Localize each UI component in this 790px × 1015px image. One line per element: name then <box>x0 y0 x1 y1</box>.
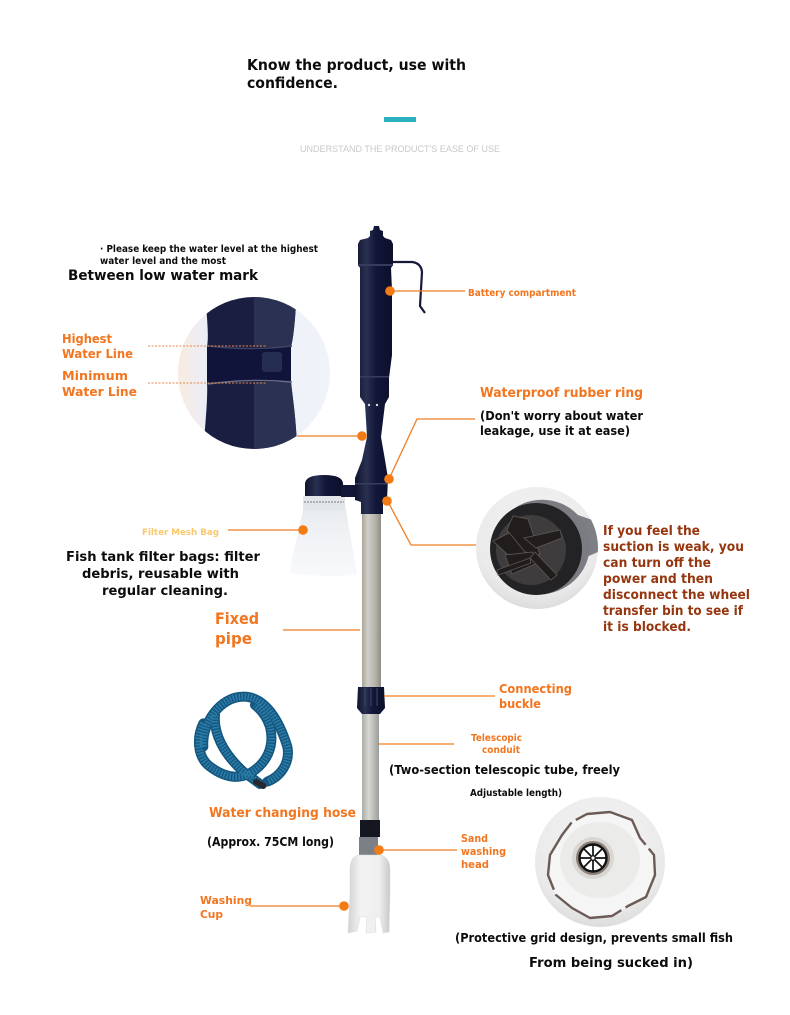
water line labels: Highest <box>62 331 112 346</box>
connecting buckle <box>357 687 385 714</box>
note: rubber ring: leakage, use it at ease) <box>480 424 630 438</box>
note: rubber ring: (Don't worry about water <box>480 409 643 423</box>
title: Know the product, use with <box>247 56 466 74</box>
label: sand washing head: head <box>461 859 489 871</box>
label: fixed pipe: pipe <box>215 629 252 648</box>
water changing hose <box>199 697 288 786</box>
pump body <box>355 226 393 514</box>
water level note <box>68 244 318 284</box>
detail circle: water lines <box>178 290 330 455</box>
note: suction: power and then <box>603 572 713 587</box>
water level note: water level and the most <box>100 256 226 267</box>
label: telescopic conduit: conduit <box>482 745 520 756</box>
water level note: Between low water mark <box>68 268 259 284</box>
filter bag <box>289 505 357 576</box>
label: washing cup <box>200 894 252 921</box>
note: suction: If you feel the <box>603 524 700 539</box>
label: battery compartment: Battery compartment <box>468 288 576 299</box>
hook <box>392 262 425 313</box>
sand head neck <box>359 837 378 855</box>
label: sand washing head <box>461 833 506 871</box>
product: pump <box>289 226 425 933</box>
note: protective grid: (Protective grid design, prevents small fish <box>455 931 733 945</box>
note: filter bags: debris, reusable with <box>82 566 239 582</box>
note: telescopic tube <box>389 763 620 799</box>
note: telescopic tube: (Two-section telescopic tube, freely <box>389 763 620 777</box>
label: telescopic conduit <box>471 733 522 756</box>
filter cap <box>305 475 343 496</box>
upper tube <box>362 510 381 688</box>
label: sand washing head: Sand <box>461 833 488 845</box>
note: protective grid <box>455 931 733 971</box>
label: sand washing head: washing <box>461 846 506 858</box>
title accent bar <box>384 117 416 122</box>
water level note: · Please keep the water level at the highest <box>100 244 318 255</box>
label: telescopic conduit: Telescopic <box>471 733 522 744</box>
label: washing cup: Cup <box>200 908 223 921</box>
title <box>247 56 466 92</box>
note: rubber ring <box>480 409 643 438</box>
title: confidence. <box>247 74 338 92</box>
label: fixed pipe: Fixed <box>215 609 259 628</box>
water line labels: Water Line <box>62 346 133 361</box>
dashed water level lines <box>148 346 266 383</box>
note: suction: suction is weak, you <box>603 540 744 555</box>
note: filter bags: regular cleaning. <box>102 583 228 599</box>
label: water changing hose: Water changing hose <box>209 806 356 821</box>
label: connecting buckle <box>499 681 572 711</box>
note: telescopic tube: Adjustable length) <box>470 788 562 799</box>
callout dots <box>298 286 395 911</box>
note: filter bags: Fish tank filter bags: filter <box>66 549 260 565</box>
water line labels: Minimum <box>62 368 128 383</box>
note: suction <box>603 524 750 635</box>
note: hose length: (Approx. 75CM long) <box>207 835 334 849</box>
label: connecting buckle: buckle <box>499 696 541 711</box>
note: suction: it is blocked. <box>603 620 691 635</box>
lower tube <box>362 712 379 822</box>
detail circle: impeller <box>476 485 604 609</box>
note: filter bags <box>66 549 260 599</box>
note: suction: transfer bin to see if <box>603 604 743 619</box>
detail circle: protective grid <box>535 797 665 927</box>
washing cup <box>348 855 390 933</box>
note: suction: can turn off the <box>603 556 711 571</box>
subtitle: UNDERSTAND THE PRODUCT'S EASE OF USE <box>300 144 500 155</box>
label: waterproof rubber ring: Waterproof rubber ring <box>480 386 643 401</box>
note: protective grid: From being sucked in) <box>529 955 693 971</box>
label: connecting buckle: Connecting <box>499 681 572 696</box>
label: filter mesh bag: Filter Mesh Bag <box>142 528 219 538</box>
dark band <box>360 820 380 837</box>
water line labels: Water Line <box>62 384 137 399</box>
water line labels <box>62 331 137 399</box>
label: fixed pipe <box>215 609 259 648</box>
label: washing cup: Washing <box>200 894 252 907</box>
note: suction: disconnect the wheel <box>603 588 750 603</box>
leader lines <box>228 291 495 906</box>
